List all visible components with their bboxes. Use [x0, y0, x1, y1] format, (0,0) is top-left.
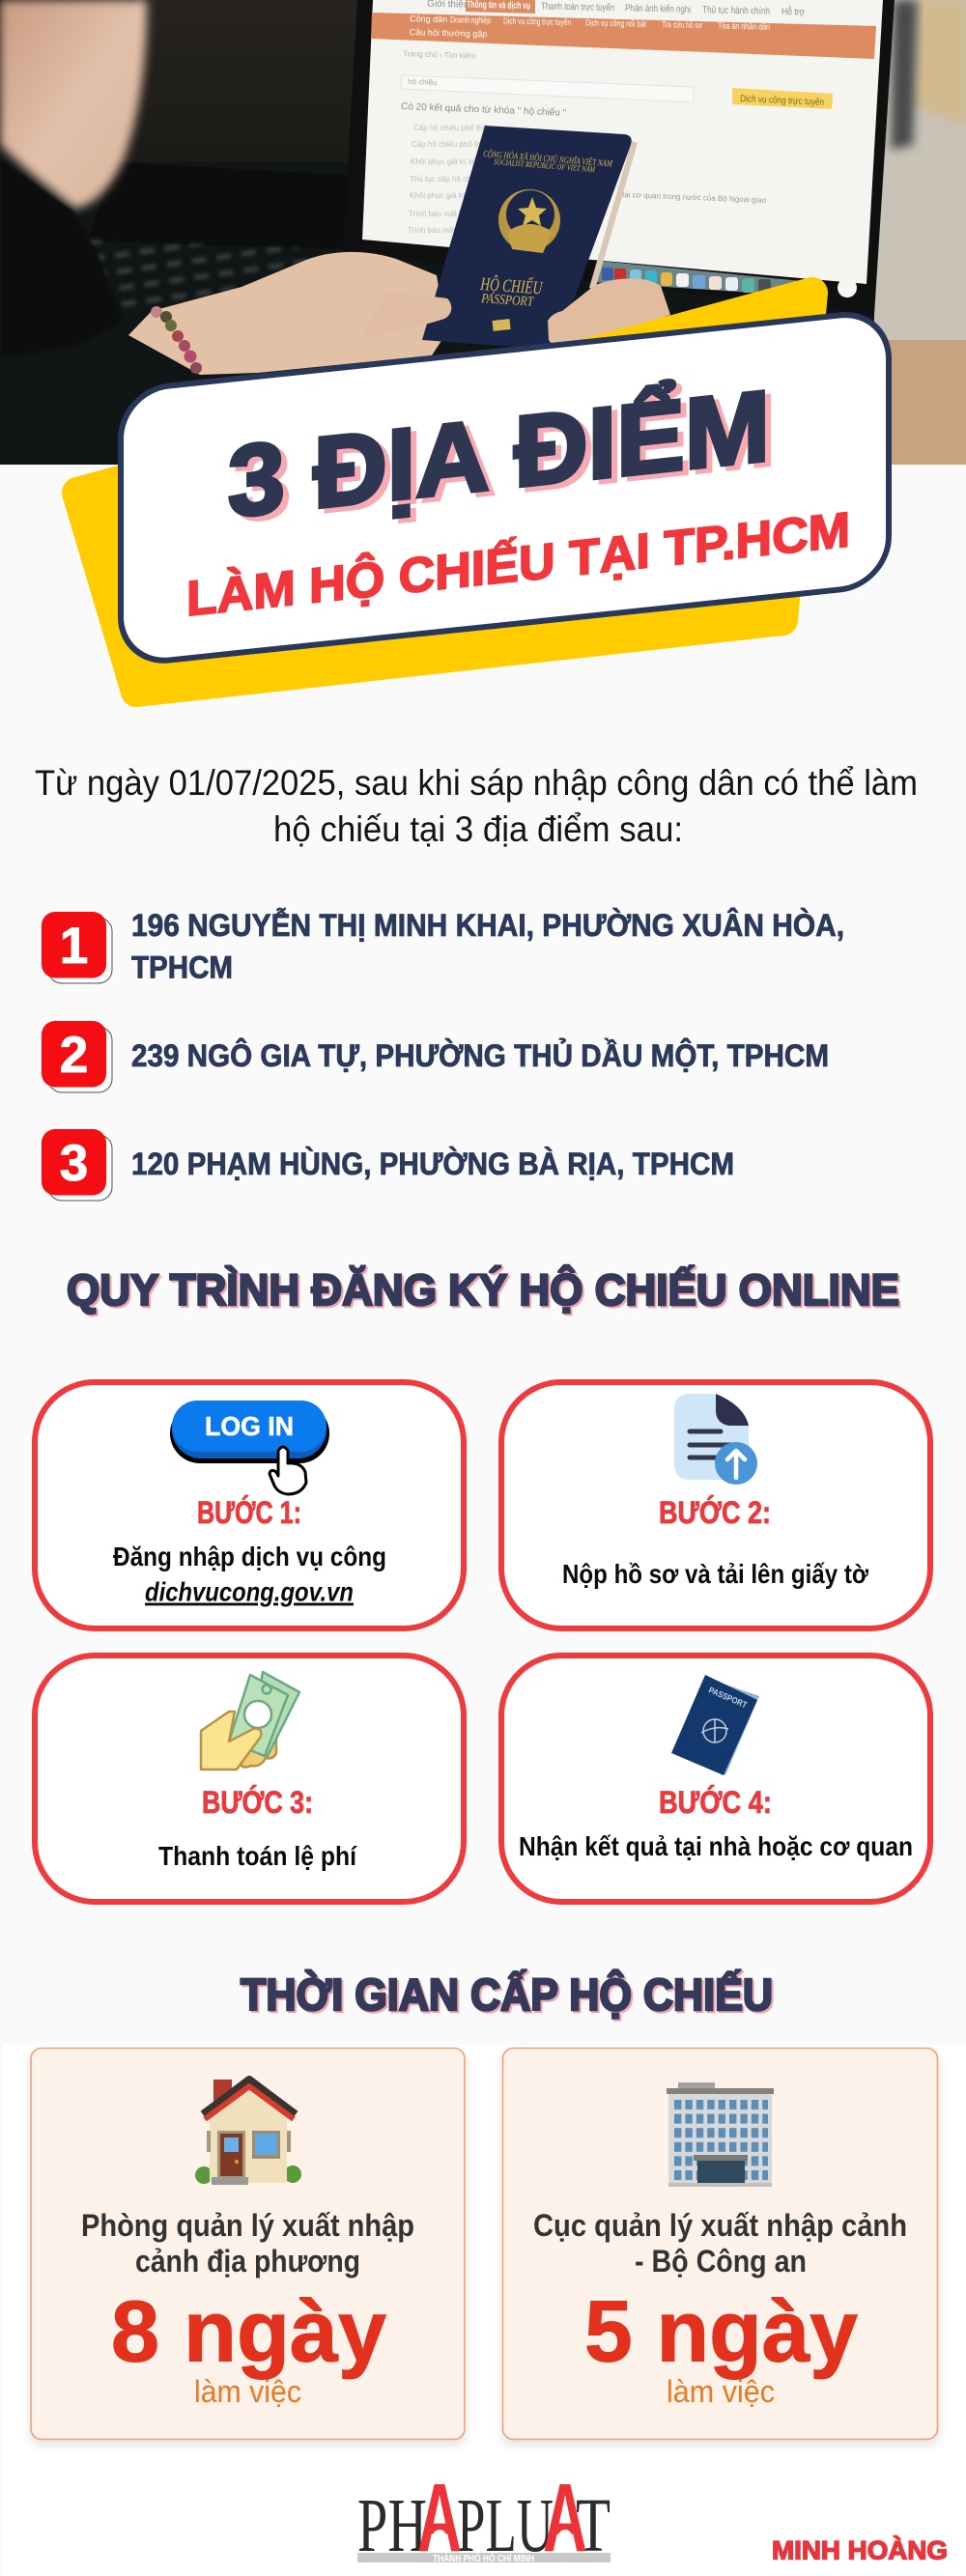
laptop screen: Hỗ trợ — [781, 5, 806, 18]
working days label: làm việc — [194, 2374, 301, 2409]
office name — [533, 2208, 907, 2279]
author credit: MINH HOÀNG — [772, 2534, 948, 2565]
laptop screen: Thủ tục cấp hộ chiếu — [410, 175, 481, 184]
intro text: hộ chiếu tại 3 địa điểm sau: — [273, 809, 683, 849]
step 1 label: BƯỚC 1: — [197, 1495, 301, 1530]
intro text: Từ ngày 01/07/2025, sau khi sáp nhập công dân có thể làm — [35, 763, 918, 803]
logo: Pháp Luật: THÀNH PHỐ HỒ CHÍ MINH — [433, 2551, 534, 2564]
passport cover: PASSPORT — [480, 292, 535, 310]
location 3 — [42, 1129, 734, 1201]
laptop bezel — [343, 0, 895, 315]
laptop screen: tại cơ quan trong nước của Bộ Ngoại giao — [622, 190, 767, 205]
badge 1: 1 — [60, 918, 88, 975]
location 1 — [42, 908, 844, 985]
laptop screen: Trình báo mất hộ chiếu — [409, 210, 488, 218]
icon: office building — [667, 2082, 774, 2187]
dark sleeve — [0, 159, 123, 357]
value: 8 days: 8 ngày — [111, 2283, 386, 2380]
location 2 — [42, 1021, 829, 1092]
photo: hands holding passport in front of laptop — [0, 0, 966, 465]
logo: Pháp Luật: T — [576, 2484, 611, 2568]
address 1: 196 NGUYỄN THỊ MINH KHAI, PHƯỜNG XUÂN HÒA, — [131, 908, 844, 943]
badge 3: 3 — [60, 1135, 88, 1192]
laptop screen: Dịch vụ công nổi bật — [585, 17, 647, 29]
heading: issue time: THỜI GIAN CẤP HỘ CHIẾU — [241, 1969, 773, 2020]
laptop screen: Tòa án nhân dân — [718, 21, 770, 32]
badge 1 — [42, 912, 112, 983]
icon: log in button — [170, 1401, 329, 1494]
address 2: 239 NGÔ GIA TỰ, PHƯỜNG THỦ DẦU MỘT, TPHCM — [131, 1038, 829, 1073]
laptop screen: Công dân — [410, 14, 447, 24]
office name — [81, 2208, 414, 2279]
laptop screen: Dịch vụ công trực tuyến — [503, 15, 571, 27]
logo: Pháp Luật: PLU — [457, 2484, 554, 2568]
laptop screen: Khôi phục giá trị sử dụng — [410, 191, 496, 200]
address 1: TPHCM — [131, 950, 233, 985]
main title shadow: 3 ĐỊA ĐIỂM — [234, 374, 776, 543]
laptop screen: Có 20 kết quả cho từ khóa " hộ chiếu " — [401, 100, 567, 119]
panel: step 4 — [501, 1656, 930, 1902]
laptop screen: Cấp hộ chiếu phổ thông — [413, 124, 496, 132]
value: 5 days: 5 ngày — [584, 2283, 858, 2380]
laptop screen: Cấp hộ chiếu phổ thông — [412, 140, 494, 149]
badge 3 — [42, 1129, 112, 1201]
icon: house — [195, 2080, 301, 2185]
laptop screen — [362, 0, 883, 284]
left hand behind passport — [128, 252, 446, 375]
main title: 3 ĐỊA ĐIỂM — [228, 369, 770, 539]
customer's face blurred in foreground — [0, 0, 147, 209]
step 1 text: dichvucong.gov.vn — [145, 1576, 354, 1607]
white lower background — [3, 2045, 966, 2576]
office name: Phòng quản lý xuất nhập — [81, 2208, 414, 2243]
keyboard — [90, 238, 307, 307]
passport cover: CỘNG HÒA XÃ HỘI CHỦ NGHĨA VIỆT NAM — [483, 148, 613, 170]
sticker dot — [838, 282, 857, 297]
step 1 text — [113, 1542, 386, 1607]
thumb over passport — [427, 297, 452, 325]
logo: Pháp Luật — [357, 2464, 611, 2572]
laptop screen: Doanh nghiệp — [450, 14, 491, 25]
step 2 label: BƯỚC 2: — [659, 1495, 771, 1530]
badge 2: 2 — [60, 1027, 88, 1084]
laptop screen: Thủ tục hành chính — [702, 4, 770, 17]
icon: passport booklet — [671, 1675, 759, 1775]
panel: local immigration office — [31, 2048, 465, 2440]
heading: online process: QUY TRÌNH ĐĂNG KÝ HỘ CHIẾU ONLINE — [67, 1265, 899, 1315]
laptop screen: Thông tin và dịch vụ — [467, 0, 530, 12]
heading: online process: QUY TRÌNH ĐĂNG KÝ HỘ CHIẾU ONLINE — [69, 1267, 901, 1316]
address 1 — [131, 908, 844, 985]
step 4 label: BƯỚC 4: — [659, 1785, 772, 1820]
title card — [121, 310, 889, 665]
working days label: làm việc — [667, 2374, 775, 2409]
laptop screen: Trình báo mất hộ chiếu — [408, 226, 487, 235]
logo: Pháp Luật: A — [417, 2464, 462, 2572]
step 2 text: Nộp hồ sơ và tải lên giấy tờ — [562, 1559, 868, 1589]
laptop dock — [597, 261, 798, 293]
laptop screen: Phản ánh kiến nghị — [625, 2, 691, 15]
badge 2 — [42, 1021, 112, 1092]
office name: - Bộ Công an — [635, 2244, 807, 2279]
step 3 text: Thanh toán lệ phí — [158, 1841, 357, 1871]
panel: step 3 — [35, 1656, 464, 1902]
subtitle: LÀM HỘ CHIẾU TẠI TP.HCM — [186, 500, 850, 627]
icon: log in button: LOG IN — [205, 1411, 294, 1441]
panel: step 2 — [501, 1382, 930, 1628]
panel: immigration department — [502, 2048, 937, 2440]
step 4 text: Nhận kết quả tại nhà hoặc cơ quan — [519, 1831, 913, 1861]
right hand fingers — [548, 278, 670, 348]
office name: Cục quản lý xuất nhập cảnh — [533, 2208, 907, 2243]
step 3 label: BƯỚC 3: — [202, 1785, 313, 1820]
laptop screen: Thanh toán trực tuyến — [541, 0, 614, 14]
laptop screen: Dịch vụ công trực tuyến — [740, 93, 824, 108]
passport cover — [422, 126, 638, 350]
panel: step 1 — [35, 1382, 464, 1628]
laptop screen: Trang chủ › Tìm kiếm — [403, 49, 476, 61]
icon: hand with money — [201, 1672, 299, 1769]
right side blurred background — [874, 0, 966, 465]
passport cover: SOCIALIST REPUBLIC OF VIET NAM — [494, 156, 596, 174]
step 1 text: Đăng nhập dịch vụ công — [113, 1542, 386, 1571]
icon: passport booklet: PASSPORT — [707, 1685, 749, 1710]
heading: issue time: THỜI GIAN CẤP HỘ CHIẾU — [242, 1971, 775, 2022]
yellow backing shape — [77, 293, 812, 692]
bracelet — [151, 306, 202, 374]
laptop screen: Khôi phục giá trị sử dụng — [411, 157, 497, 166]
logo: Pháp Luật: PH — [357, 2484, 427, 2568]
laptop screen: Câu hỏi thường gặp — [410, 27, 487, 39]
laptop screen: hộ chiếu — [408, 77, 437, 87]
intro text — [35, 763, 918, 849]
icon: document upload — [674, 1394, 757, 1485]
laptop screen: Tra cứu hồ sơ — [662, 19, 702, 30]
passport cover: HỘ CHIẾU — [479, 273, 544, 299]
office name: cảnh địa phương — [135, 2244, 360, 2279]
address 3: 120 PHẠM HÙNG, PHƯỜNG BÀ RỊA, TPHCM — [131, 1146, 734, 1181]
logo: Pháp Luật: A — [543, 2464, 587, 2572]
